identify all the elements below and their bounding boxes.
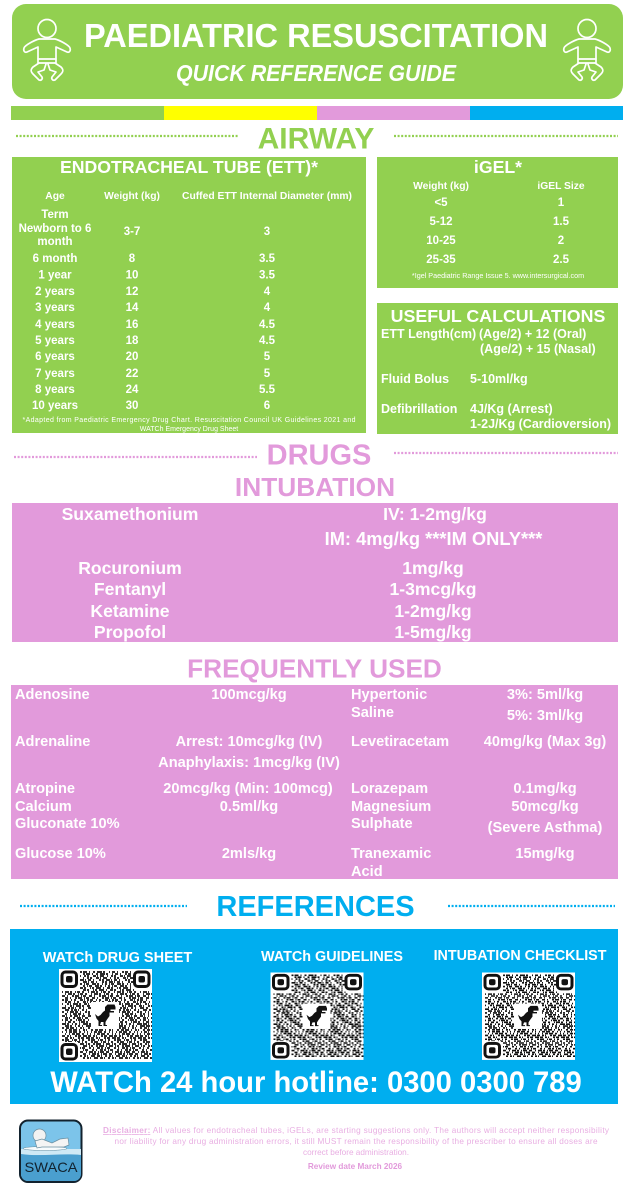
table rows: 5 [264,351,271,363]
panel: frequently used drugs: Sulphate [351,816,413,832]
panel: frequently used drugs [11,685,618,880]
panel heading: iGEL: iGEL* [474,157,522,177]
table rows: 20 [126,351,138,363]
panel: frequently used drugs: 50mcg/kg [511,799,579,815]
iGEL table: iGEL Size [537,181,585,192]
calculations list [381,327,611,431]
panel: frequently used drugs: (Severe Asthma) [488,820,602,836]
table rows: month [37,236,73,248]
heading: drugs: DRUGS [267,440,371,472]
logo: SWACA: SWACA [24,1159,78,1175]
label: drug sheet: WATCh DRUG SHEET [43,950,192,966]
QR code: drug sheet [59,969,152,1062]
panel heading: calculations: USEFUL CALCULATIONS [391,306,605,326]
panel: frequently used drugs: Gluconate 10% [15,816,120,832]
calculations list: 4J/Kg (Arrest) [470,402,553,416]
hotline: WATCh 24 hour hotline: 0300 0300 789 [50,1067,582,1099]
panel: frequently used drugs: 0.5ml/kg [220,799,278,815]
panel: frequently used drugs: Magnesium [351,799,431,815]
calculations list: Fluid Bolus [381,372,449,386]
table header: Age [45,191,65,202]
panel: intubation drugs: Suxamethonium [62,504,198,524]
footnote: *Adapted from Paediatric Emergency Drug Chart. Resuscitation Council UK Guidelines 2021 and [22,417,356,424]
panel: frequently used drugs: 0.1mg/kg [513,781,577,797]
table rows: 1 year [38,270,72,282]
panel: frequently used drugs: 20mcg/kg (Min: 100mcg) [163,781,333,797]
table rows: 4.5 [259,319,276,331]
panel: frequently used drugs: Calcium [15,799,72,815]
table rows: 3 years [35,302,75,314]
label: intubation checklist: INTUBATION CHECKLIST [434,948,607,964]
heading: airway: AIRWAY [258,122,374,156]
calculations list: Defibrillation [381,402,457,416]
calculations list: 1-2J/Kg (Cardioversion) [470,417,611,431]
panel: intubation drugs: IM: 4mg/kg ***IM ONLY*** [325,528,543,549]
panel: intubation drugs: Propofol [94,622,166,642]
header banner [12,4,623,99]
table rows: 8 [129,253,136,265]
QR code: guidelines [270,972,364,1060]
iGEL table: 10-25 [426,235,456,247]
table rows: 18 [126,335,139,347]
table rows: 3.5 [259,253,276,265]
table rows: 5 [264,368,271,380]
iGEL table [413,181,585,266]
label: guidelines: WATCh GUIDELINES [261,949,403,965]
icon: baby right [564,20,610,80]
panel: frequently used drugs: Lorazepam [351,781,428,797]
panel: frequently used drugs: Anaphylaxis: 1mcg/kg (IV) [158,755,340,771]
QR code: intubation checklist [482,972,575,1060]
title: PAEDIATRIC RESUSCITATION [84,17,548,54]
colour stripe [11,106,623,120]
table rows: 6 [264,400,270,412]
iGEL table: Weight (kg) [413,181,469,192]
table rows: Term [41,209,69,221]
table rows: 24 [126,384,139,396]
iGEL table: 1 [558,197,565,209]
panel: intubation drugs: 1mg/kg [402,558,464,578]
panel: frequently used drugs: 100mcg/kg [211,687,287,703]
table rows: 3.5 [259,270,276,282]
heading: references: REFERENCES [216,891,415,923]
table rows: 4 [264,302,271,314]
disclaimer: correct before administration. [303,1148,409,1157]
iGEL table: <5 [434,197,448,209]
panel: useful calculations [377,303,618,434]
table rows: 3-7 [124,226,140,238]
table rows: 4.5 [259,335,276,347]
iGEL footnote: *Igel Paediatric Range Issue 5. www.intersurgical.com [412,271,584,280]
iGEL table: 2 [558,235,564,247]
panel: intubation drugs: Rocuronium [78,558,182,578]
footnote: WATCh Emergency Drug Sheet [140,426,238,433]
table rows: 2 years [35,286,75,298]
table rows: 5.5 [259,384,276,396]
panel: intubation drugs: 1-3mcg/kg [389,579,477,599]
iGEL table: 2.5 [553,254,570,266]
panel: frequently used drugs: Hypertonic [351,687,427,703]
panel: references [10,929,618,1104]
table rows: 22 [126,368,138,380]
table rows: 14 [126,302,139,314]
iGEL table: 5-12 [429,216,453,228]
table rows: 3 [264,226,270,238]
panel: frequently used drugs: Adrenaline [15,734,90,750]
iGEL table: 1.5 [553,216,570,228]
heading: frequently used: FREQUENTLY USED [187,654,442,684]
calculations list: (Age/2) + 12 (Oral) [479,327,586,341]
calculations list: 5-10ml/kg [470,372,528,386]
panel: intubation drugs: Ketamine [90,601,170,621]
table rows: 8 years [35,384,75,396]
table header [45,191,352,202]
subtitle: QUICK REFERENCE GUIDE [176,60,457,86]
table rows [19,209,276,412]
logo: SWACA [20,1120,82,1182]
panel: frequently used drugs: Arrest: 10mcg/kg (IV) [176,734,323,750]
table rows: 6 month [33,253,77,265]
panel: intubation drugs [12,503,618,642]
panel: frequently used drugs: 5%: 3ml/kg [507,708,583,724]
panel: frequently used drugs: Acid [351,864,383,880]
panel: frequently used drugs: 15mg/kg [515,846,575,862]
panel: frequently used drugs: Tranexamic [351,846,431,862]
panel: intubation drugs: 1-2mg/kg [394,601,472,621]
panel: intubation drugs: Fentanyl [94,579,166,599]
panel: intubation drugs: IV: 1-2mg/kg [383,504,487,524]
heading: intubation: INTUBATION [235,472,395,502]
panel: frequently used drugs: Adenosine [15,687,90,703]
disclaimer: Disclaimer: All values for endotracheal tubes, iGELs, are starting suggestions only. The authors will accept neither responsibility [103,1126,610,1135]
panel heading: ETT: ENDOTRACHEAL TUBE (ETT)* [60,157,318,177]
table rows: 12 [126,286,138,298]
panel: frequently used drugs: 40mg/kg (Max 3g) [484,734,606,750]
panel: iGEL [377,157,618,288]
iGEL table: 25-35 [426,254,456,266]
table header: Cuffed ETT Internal Diameter (mm) [182,191,352,202]
table rows: 6 years [35,351,75,363]
heading: drugs [14,440,618,472]
calculations list: (Age/2) + 15 (Nasal) [480,342,596,356]
panel: frequently used drugs: 2mls/kg [222,846,276,862]
table rows: 10 [126,270,138,282]
table rows: 4 [264,286,271,298]
table rows: 16 [126,319,138,331]
panel: frequently used drugs: 3%: 5ml/kg [507,687,583,703]
table rows: 5 years [35,335,75,347]
table rows: 30 [126,400,138,412]
panel: frequently used drugs: Levetiracetam [351,734,449,750]
disclaimer [103,1126,610,1171]
panel: frequently used drugs: Glucose 10% [15,846,106,862]
table header: Weight (kg) [104,191,160,202]
icon: baby left [24,20,70,80]
footnote [22,417,356,433]
table rows: 10 years [32,400,78,412]
disclaimer: nor liability for any drug administration errors, it still MUST remain the responsibility of the prescriber to ensure all doses are [114,1137,598,1146]
table rows: Newborn to 6 [19,223,91,235]
panel: frequently used drugs: Saline [351,705,394,721]
panel: endotracheal tube table [12,157,366,433]
disclaimer: Review date March 2026 [308,1162,403,1171]
panel: frequently used drugs: Atropine [15,781,75,797]
panel: intubation drugs: 1-5mg/kg [394,622,472,642]
table rows: 4 years [35,319,75,331]
table rows: 7 years [35,368,75,380]
calculations list: ETT Length(cm) [381,327,476,341]
